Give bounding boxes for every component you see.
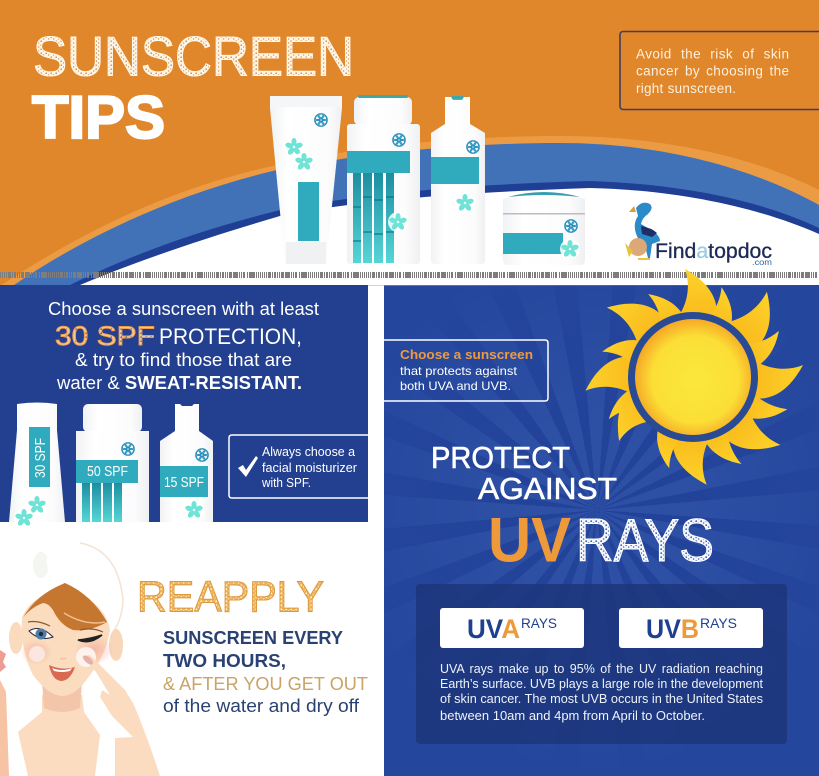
logo: findatopdoc: .com [752,258,772,267]
callout: avoid the risk: right sunscreen. [636,81,736,96]
text block: reapply instructions: TWO HOURS, [163,650,286,671]
title word: sunscreen: SUNSCREEN [33,24,354,88]
panel: choose 30 SPF [0,285,368,528]
label: UVB rays: RAYS [700,615,737,631]
label: UVA rays [440,608,584,648]
product: bottle with bars [347,95,420,264]
label: UVA rays: UVA [467,614,520,644]
text block: reapply instructions: SUNSCREEN EVERY [163,627,344,648]
decorative barcode strip [0,272,819,278]
product: slim bottle [431,96,485,264]
header background with curved bands [0,0,819,286]
callout: avoid the risk [620,32,819,110]
arm and hand [81,654,160,776]
callout: facial moisturizer: with SPF. [261,476,311,490]
heading: reapply: REAPPLY [137,572,324,622]
text block: reapply instructions: & AFTER YOU GET OUT [163,673,368,694]
panel: protect against UV rays background [384,285,819,776]
label: UVB rays: UVB [646,614,699,644]
ears [9,622,123,661]
callout: choose a sunscreen UVA UVB [384,340,548,401]
callout: choose a sunscreen UVA UVB: Choose a sunscreen [400,347,533,362]
blush [20,635,114,665]
product: jar [503,192,585,265]
callout: choose a sunscreen UVA UVB: that protects against [400,364,518,378]
illustration: woman applying sunscreen [0,543,160,776]
text block: UV facts: Earth’s surface. UVB plays a large role in the development [440,677,764,691]
heading text: choose a sunscreen: water & SWEAT-RESISTANT. [56,373,302,393]
logo: findatopdoc [625,203,772,267]
sun rays [584,269,804,486]
product: 50 SPF bottle [76,404,149,522]
left hand [0,650,9,776]
product: 50 SPF bottle: 50 SPF [87,463,128,480]
text block: UV facts: UVA rays make up to 95% of the UV radiation reaching [440,662,763,676]
heading text: choose a sunscreen: Choose a sunscreen with at least [48,299,319,319]
face [22,590,110,696]
label: UVA rays: RAYS [521,615,557,631]
text block: reapply instructions [163,627,368,716]
text block: reapply instructions: of the water and dry off [163,695,360,716]
callout: facial moisturizer: facial moisturizer [262,461,357,475]
logo: findatopdoc: Findatopdoc [655,240,772,263]
heading: protect against UV rays: AGAINST [478,471,617,506]
label: UVB rays [619,608,763,648]
heading text: choose a sunscreen [48,299,319,393]
eye wink [78,629,103,642]
eye open [28,622,53,640]
callout: facial moisturizer: Always choose a [262,445,355,459]
text block: UV facts [440,662,764,723]
callout: choose a sunscreen UVA UVB: both UVA and UVB. [400,379,511,393]
title word: tips: TIPS [32,84,165,151]
heading text: choose a sunscreen: & try to find those that are [75,350,292,370]
text block: UV facts: of skin cancer. The most UVB occurs in the United States [440,692,763,706]
heading text: choose a sunscreen: 30 SPF [55,321,155,351]
callout: avoid the risk: Avoid the risk of skin [636,46,789,62]
icon: sun [584,269,804,486]
towel [33,543,123,632]
title [32,24,354,151]
product: tube [270,96,342,264]
product: 15 SPF bottle [160,404,213,522]
heading: protect against UV rays: RAYS [576,507,714,574]
mouth [49,658,75,681]
icon: stork mascot [625,203,660,260]
product: 30 SPF tube: 30 SPF [32,438,49,478]
heading: protect against UV rays: PROTECT [431,440,570,475]
heading text: choose a sunscreen: PROTECTION, [159,324,302,349]
sunscreen dabs [29,646,96,667]
product: 15 SPF bottle: 15 SPF [164,474,204,491]
panel: UVA and UVB [416,584,787,744]
chest and neck [18,682,100,776]
text block: UV facts: between 10am and 4pm from April to October. [440,709,705,723]
hair [23,583,107,630]
heading: protect against UV rays [431,440,714,576]
heading: protect against UV rays: UV [488,506,571,576]
icon: checkmark [238,456,258,477]
callout: avoid the risk: cancer by choosing the [636,64,789,78]
product: 30 SPF tube [9,402,65,528]
callout: facial moisturizer [229,435,368,498]
